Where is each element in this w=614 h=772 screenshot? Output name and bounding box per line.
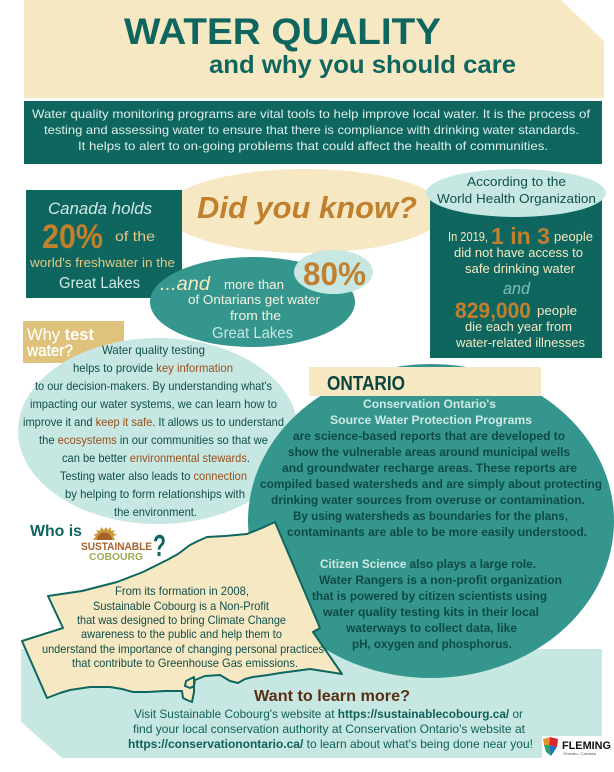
panel: World Health Organization bbox=[426, 169, 606, 358]
why test water text: to our decision-makers. By understanding what's bbox=[35, 379, 272, 393]
panel: Canada holds bbox=[26, 190, 182, 298]
why test water text: impacting our water systems, we can learn how to bbox=[30, 397, 277, 411]
Sustainable Cobourg text: From its formation in 2008, bbox=[115, 584, 249, 598]
want to learn more heading: Want to learn more? bbox=[254, 688, 410, 705]
panel: why test water ellipse bbox=[18, 338, 298, 524]
conservation ontario text: drinking water sources from overuse or contamination. bbox=[271, 493, 585, 507]
conservation ontario text: compiled based watersheds and are simply about protecting bbox=[260, 477, 602, 491]
Sustainable Cobourg text: awareness to the public and help them to bbox=[81, 627, 282, 641]
Sustainable Cobourg text: that was designed to bring Climate Change bbox=[77, 613, 286, 627]
stat text: 1 in 3: In 2019, bbox=[448, 230, 488, 244]
label: why test water bbox=[23, 321, 124, 363]
conservation ontario text: By using watersheds as boundaries for the plans, bbox=[293, 509, 568, 523]
Sustainable Cobourg text: that contribute to Greenhouse Gas emissions. bbox=[72, 656, 298, 670]
80% bubble bbox=[294, 250, 373, 294]
panel: want to learn more bbox=[21, 649, 602, 758]
stat text: 829,000: die each year from bbox=[465, 320, 572, 334]
great lakes: Great Lakes bbox=[59, 275, 140, 292]
why test water text: Testing water also leads to connection bbox=[60, 469, 247, 483]
heading: who is: Who is bbox=[30, 523, 82, 540]
did you know heading: Did you know? bbox=[197, 190, 417, 225]
learn more text: find your local conservation authority at Conservation Ontario's website at bbox=[133, 722, 526, 736]
great lakes: Great Lakes bbox=[212, 325, 293, 342]
panel: Ontario circle bbox=[248, 364, 614, 678]
question mark: ? bbox=[153, 528, 166, 563]
why test water text: Water quality testing bbox=[102, 343, 205, 357]
Sustainable Cobourg text bbox=[42, 584, 324, 670]
Ontario heading: ONTARIO bbox=[327, 373, 405, 395]
WHO heading: According to the bbox=[467, 174, 566, 189]
citizen science text: Citizen Science also plays a large role. bbox=[320, 557, 536, 571]
subtitle: and why you should care bbox=[209, 51, 516, 79]
stat text: 829,000: people bbox=[537, 304, 577, 318]
citizen science text: waterways to collect data, like bbox=[345, 621, 517, 635]
icon: Fleming shield bbox=[543, 737, 558, 756]
panel: Sustainable Cobourg map shape bbox=[22, 522, 342, 702]
stat text: 1 in 3: did not have access to bbox=[454, 246, 583, 260]
panel: Ontarians ellipse bbox=[150, 250, 373, 347]
Sustainable Cobourg text: Sustainable Cobourg is a Non-Profit bbox=[93, 599, 270, 613]
ontarians line: of Ontarians get water bbox=[188, 293, 320, 307]
learn more text: https://conservationontario.ca/ to learn about what's being done near you! bbox=[128, 737, 533, 751]
icon: sun bbox=[93, 527, 117, 540]
intro text: testing and assessing water to ensure that there is compliance with drinking water standards. bbox=[44, 123, 579, 137]
WHO ellipse bbox=[426, 169, 606, 217]
conservation ontario text: show the vulnerable areas around municipal wells bbox=[288, 445, 570, 459]
citizen science text: water quality testing kits in their local bbox=[322, 605, 539, 619]
why test water text bbox=[23, 343, 284, 519]
Fleming location: Ontario, Canada bbox=[563, 751, 597, 756]
and: and bbox=[503, 279, 531, 298]
stat: 20%: 20% bbox=[42, 218, 103, 256]
conservation ontario text: Source Water Protection Programs bbox=[330, 413, 532, 427]
logo wordmark: SUSTAINABLE bbox=[81, 541, 152, 553]
citizen science text: that is powered by citizen scientists using bbox=[312, 589, 547, 603]
stat text: 1 in 3: safe drinking water bbox=[465, 262, 575, 276]
conservation ontario text: contaminants are able to be more easily understood. bbox=[287, 525, 587, 539]
intro text bbox=[32, 107, 591, 153]
intro panel bbox=[24, 101, 602, 164]
why test water text: improve it and keep it safe. It allows us to understand bbox=[23, 415, 284, 429]
conservation ontario text bbox=[260, 397, 602, 539]
citizen science text bbox=[312, 557, 562, 651]
stat text: 1 in 3: people bbox=[554, 230, 593, 244]
logo: Sustainable Cobourg: COBOURG bbox=[89, 551, 143, 563]
from the: from the bbox=[230, 309, 281, 323]
Sustainable Cobourg text: understand the importance of changing personal practices bbox=[42, 642, 324, 656]
conservation ontario text: and groundwater recharge areas. These reports are bbox=[282, 461, 577, 475]
conservation ontario text: Conservation Ontario's bbox=[363, 397, 496, 411]
Fleming wordmark: FLEMING bbox=[562, 740, 611, 752]
intro text: It helps to alert to on-going problems that could affect the health of communities. bbox=[78, 139, 548, 153]
did you know ellipse bbox=[165, 169, 445, 253]
why test water text: helps to provide key information bbox=[73, 361, 233, 375]
label: why test water: Why test bbox=[27, 325, 94, 344]
learn more text bbox=[128, 707, 533, 751]
citizen science text: pH, oxygen and phosphorus. bbox=[352, 637, 512, 651]
why test water text: by helping to form relationships with bbox=[65, 487, 245, 501]
intro text: Water quality monitoring programs are vital tools to help improve local water. It is the process of bbox=[32, 107, 591, 121]
learn more text: Visit Sustainable Cobourg's website at https://sustainablecobourg.ca/ or bbox=[134, 707, 523, 721]
and label: ...and bbox=[160, 274, 211, 295]
stat text: 1 in 3: 1 in 3 bbox=[491, 223, 550, 249]
why test water text: can be better environmental stewards. bbox=[62, 451, 250, 465]
canada holds label: Canada holds bbox=[48, 199, 152, 218]
stat text: 1 in 3 bbox=[448, 223, 593, 276]
stat text: 829,000: 829,000 bbox=[455, 298, 531, 323]
stat: 80%: 80% bbox=[303, 256, 366, 292]
more than: more than bbox=[224, 278, 284, 292]
why test water text: the ecosystems in our communities so that we bbox=[39, 433, 268, 447]
label: why test water: water? bbox=[26, 341, 73, 360]
Ontario banner bbox=[309, 367, 541, 396]
why test water text: the environment. bbox=[114, 505, 197, 519]
freshwater line: world's freshwater in the bbox=[29, 255, 175, 270]
panel: World Health Organization: World Health Organization bbox=[437, 191, 596, 206]
stat text: 829,000: water-related illnesses bbox=[455, 336, 585, 350]
conservation ontario text: are science-based reports that are developed to bbox=[293, 429, 565, 443]
title: WATER QUALITY bbox=[124, 11, 441, 52]
stat text: 829,000 bbox=[455, 298, 585, 350]
logo: Fleming bbox=[542, 736, 614, 760]
of the: of the bbox=[115, 228, 155, 244]
logo: Sustainable Cobourg bbox=[81, 527, 152, 563]
citizen science text: Water Rangers is a non-profit organization bbox=[319, 573, 562, 587]
title banner bbox=[24, 0, 604, 98]
